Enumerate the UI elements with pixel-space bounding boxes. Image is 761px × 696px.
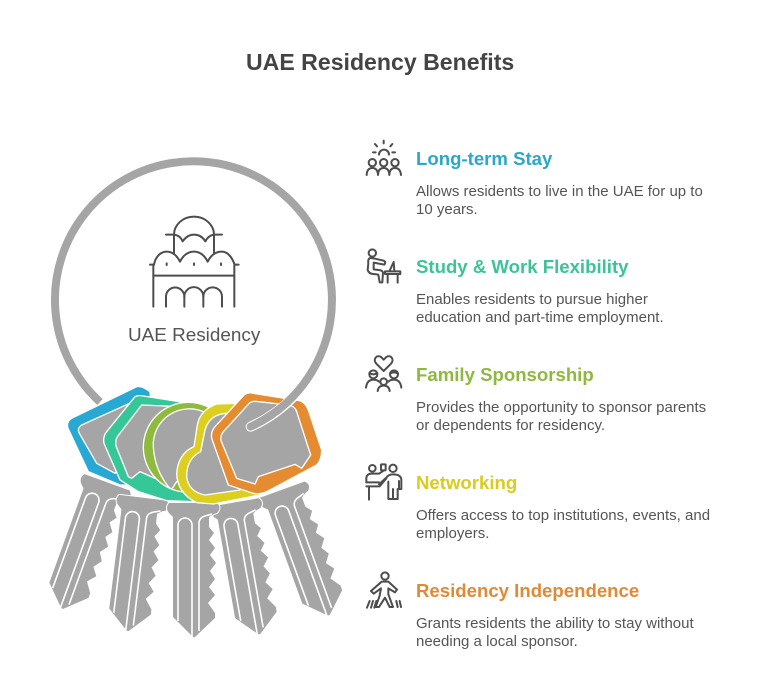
ring end through orange fob — [251, 368, 314, 427]
icon: walking person — [367, 572, 401, 608]
center label: UAE Residency — [128, 325, 260, 346]
fob: blue — [67, 386, 157, 485]
section: Residency Independence: Grants residents the ability to stay without — [416, 615, 694, 632]
section: Family Sponsorship — [416, 364, 706, 434]
fob: yellow — [177, 403, 260, 504]
section: Residency Independence — [416, 580, 694, 650]
section: Family Sponsorship: Provides the opportunity to sponsor parents — [416, 399, 706, 416]
fob: orange — [211, 393, 322, 494]
icon: person at desk — [368, 249, 400, 283]
section: Study & Work Flexibility: education and part-time employment. — [416, 309, 664, 326]
icon: family with heart — [366, 356, 401, 391]
key fobs — [67, 368, 322, 504]
keys — [37, 473, 353, 639]
section: Family Sponsorship: Family Sponsorship — [416, 364, 594, 385]
ring — [55, 161, 332, 402]
title: UAE Residency Benefits — [246, 49, 514, 75]
fob: green — [104, 396, 193, 502]
section: Networking: Offers access to top institutions, events, and — [416, 507, 710, 524]
section: Networking: Networking — [416, 472, 517, 493]
section: Long-term Stay: Allows residents to live in the UAE for up to — [416, 183, 703, 200]
section: Residency Independence: Residency Independence — [416, 580, 639, 601]
section: Residency Independence: needing a local sponsor. — [416, 633, 578, 650]
section: Study & Work Flexibility — [416, 256, 664, 326]
section: Networking: employers. — [416, 525, 489, 542]
icon: building — [150, 217, 239, 307]
section: Networking — [416, 472, 710, 542]
section: Long-term Stay: 10 years. — [416, 201, 478, 218]
section: Long-term Stay — [416, 148, 703, 218]
icon: two people networking — [366, 464, 401, 500]
section: Long-term Stay: Long-term Stay — [416, 148, 552, 169]
fob: lime — [143, 402, 233, 492]
section: Study & Work Flexibility: Enables residents to pursue higher — [416, 291, 648, 308]
icon: people under sun — [367, 141, 401, 175]
section: Study & Work Flexibility: Study & Work Flexibility — [416, 256, 628, 277]
section: Family Sponsorship: or dependents for residency. — [416, 417, 605, 434]
